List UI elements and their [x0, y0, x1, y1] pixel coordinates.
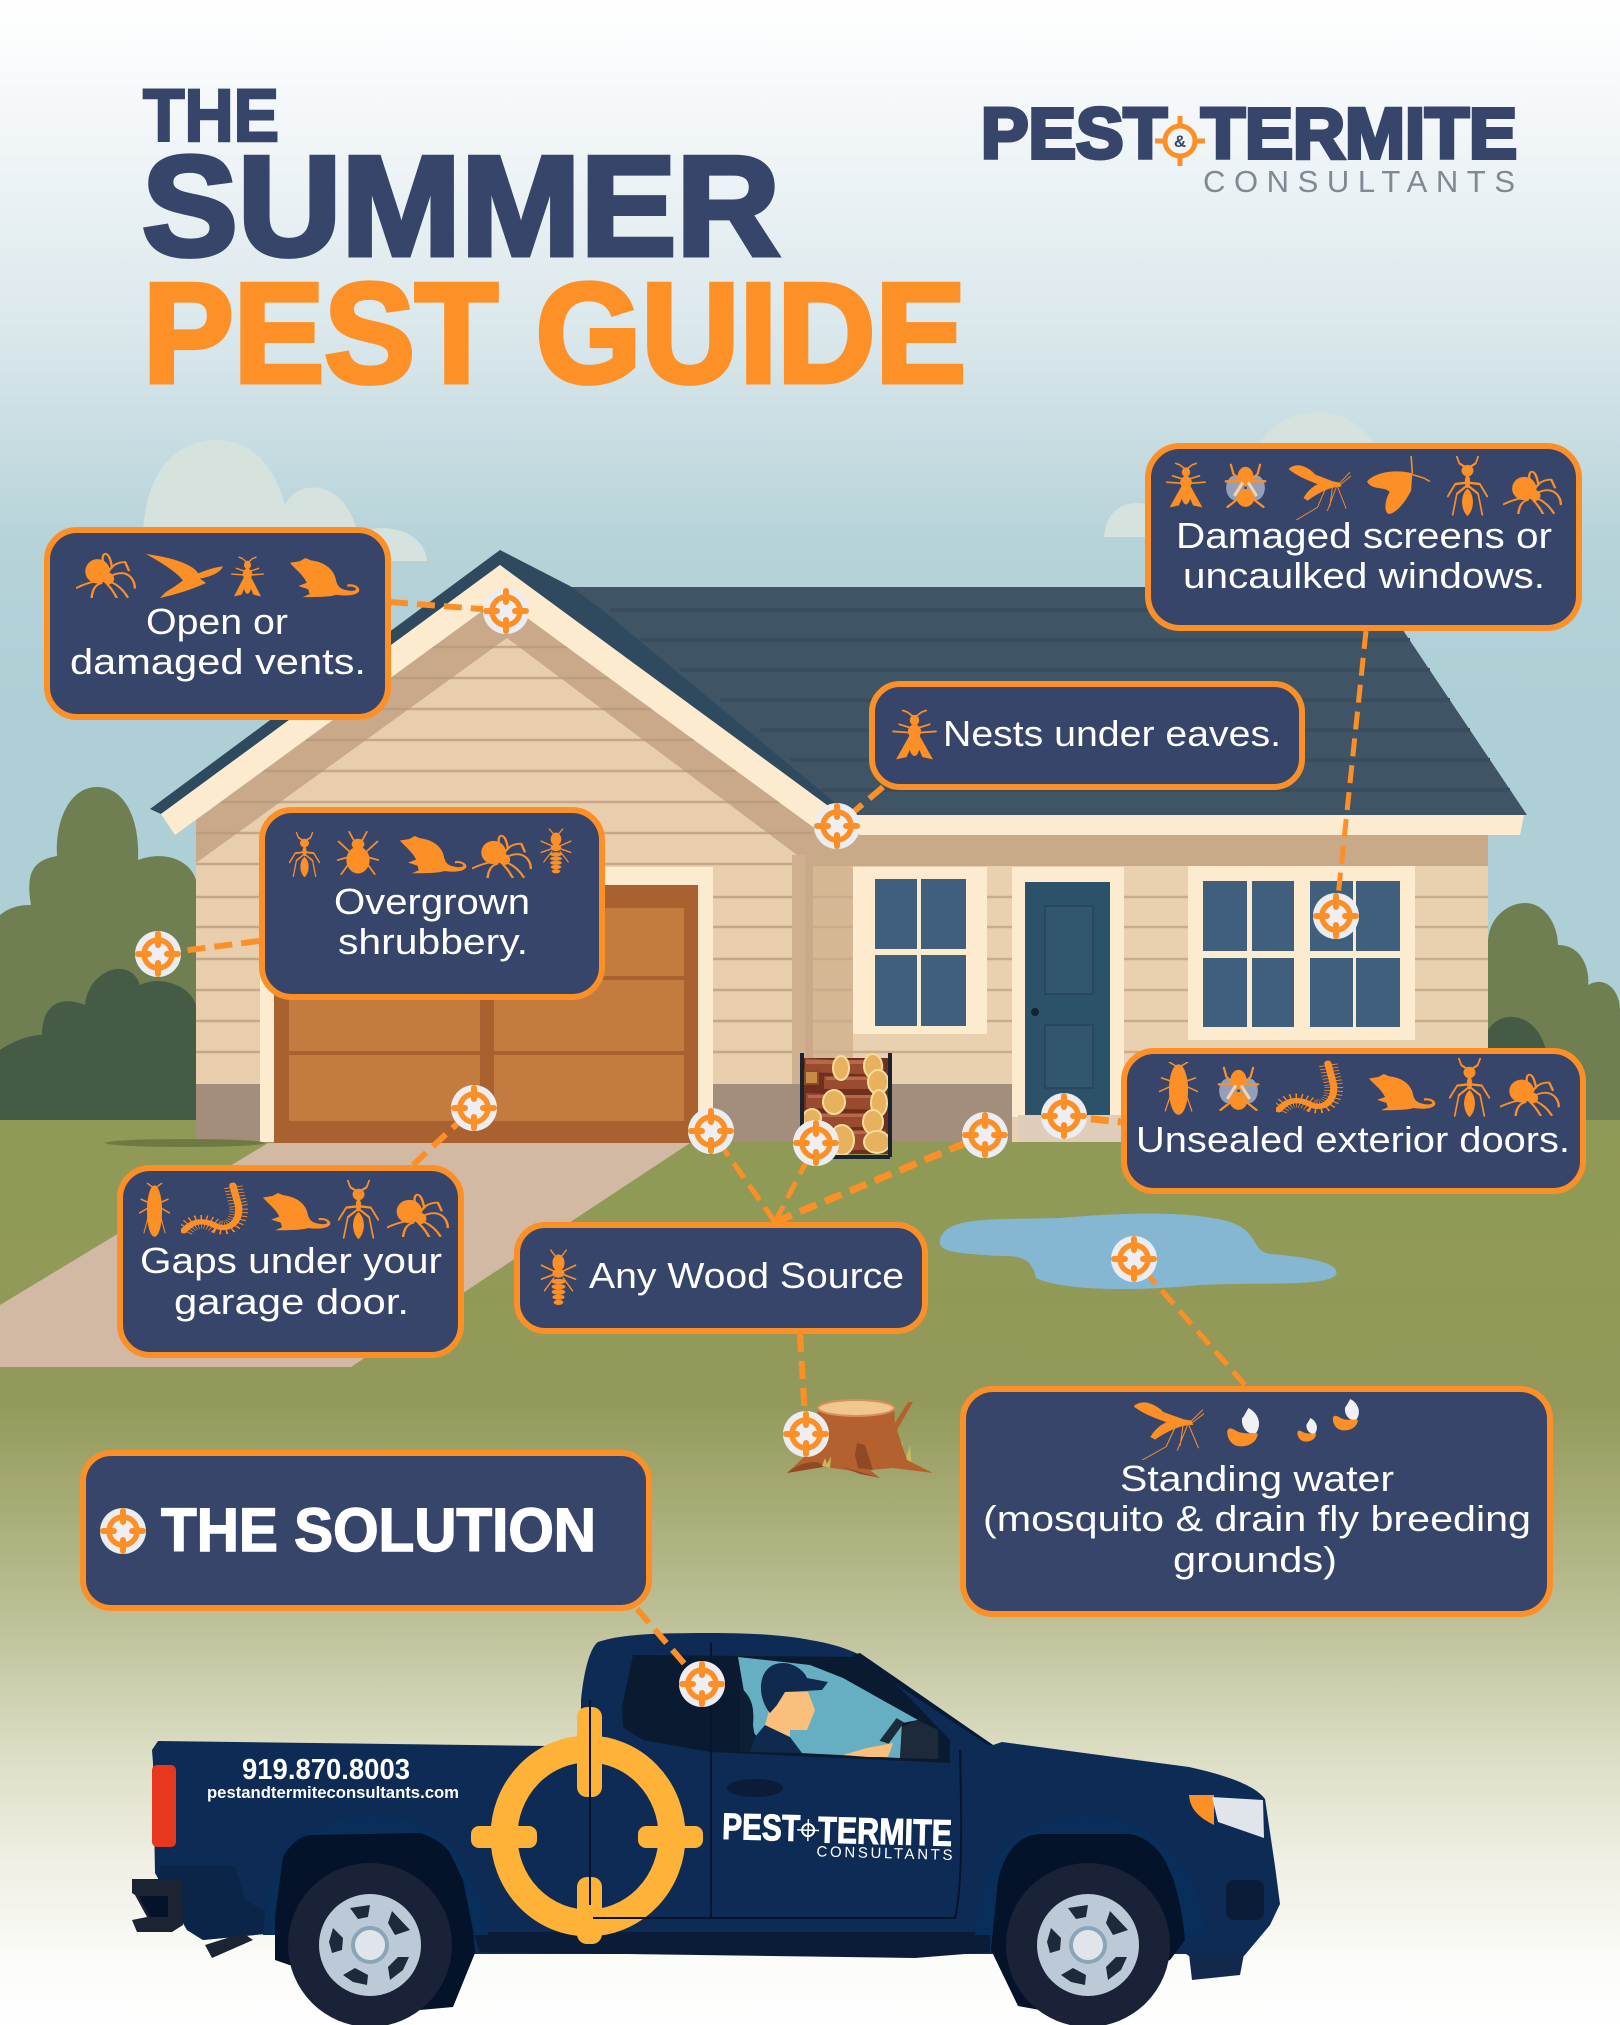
foundation: [196, 1084, 1012, 1142]
truck logo: TERMITE: [818, 1809, 953, 1854]
seat: [740, 1687, 757, 1752]
truck phone number: 919.870.8003: [242, 1754, 410, 1786]
dashed connector lines: [158, 602, 1366, 1684]
panel: the solution: [83, 1453, 649, 1608]
text: grounds): [1173, 1539, 1337, 1580]
panel: open or damaged vents: [47, 530, 388, 717]
driver: [740, 1663, 938, 1759]
truck lower sill: [473, 1932, 990, 1958]
text: damaged vents.: [70, 641, 366, 682]
text: garage door.: [174, 1281, 409, 1322]
text: Open or: [146, 601, 288, 642]
company logo: [981, 95, 1517, 199]
icon: termite: [541, 1250, 576, 1305]
wood pile: [802, 1053, 890, 1157]
rear fender: [263, 1816, 488, 1935]
text: [983, 1458, 1531, 1580]
lawn shadow: [105, 1139, 265, 1147]
icons: [1159, 1059, 1559, 1117]
text: [334, 881, 530, 962]
front fender: [975, 1816, 1205, 1935]
hitch step: [205, 1933, 253, 1958]
text: Any Wood Source: [589, 1255, 904, 1296]
icon: wasp: [893, 711, 936, 759]
cab window: [622, 1655, 950, 1763]
target markers: [135, 588, 1359, 1707]
text: [140, 1240, 442, 1322]
puddle: [940, 1214, 1336, 1289]
heading: THE SOLUTION: [161, 1496, 596, 1564]
truck logo: CONSULTANTS: [816, 1843, 953, 1864]
panel: damaged screens: [1148, 446, 1579, 628]
trees right: [1488, 903, 1620, 1125]
steering wheel: [882, 1720, 902, 1742]
truck logo: PEST: [722, 1806, 801, 1849]
icons: [290, 829, 571, 878]
gable roof edge: [150, 550, 500, 814]
truck website: pestandtermiteconsultants.com: [207, 1783, 459, 1802]
house: [105, 550, 1527, 1147]
panel: gaps under garage door: [120, 1168, 461, 1355]
rear wheel arch: [275, 1833, 475, 2010]
door handle: [727, 1779, 783, 1797]
front wheel: [1006, 1863, 1170, 2025]
tree stump: [787, 1400, 933, 1478]
company logo: TERMITE: [1201, 95, 1517, 174]
cap: [761, 1663, 828, 1713]
company logo: &: [1174, 132, 1186, 151]
text: Nests under eaves.: [943, 713, 1281, 754]
text: Gaps under your: [140, 1240, 442, 1281]
grille vent: [1226, 1880, 1264, 1920]
right window: [1188, 866, 1415, 1040]
truck: [132, 1633, 1280, 2025]
gable trim: [161, 565, 840, 835]
big crosshair: [471, 1707, 703, 1944]
trees left: [0, 787, 196, 1125]
icons: [1167, 456, 1561, 520]
driveway: [0, 1143, 690, 1367]
icons: [1134, 1399, 1359, 1460]
headlight: [1189, 1795, 1264, 1838]
title: PEST GUIDE: PEST GUIDE: [143, 254, 966, 413]
title: SUMMER: SUMMER: [142, 127, 780, 286]
panel: nests under eaves: [872, 684, 1302, 787]
panel: overgrown shrubbery: [262, 810, 602, 997]
rear wheel: [288, 1863, 452, 2025]
front wheel arch: [991, 1834, 1185, 2010]
roof shadow strip: [852, 1653, 993, 1745]
text: Overgrown: [334, 881, 530, 922]
truck body: [152, 1633, 1280, 1956]
right cloud: [1104, 412, 1385, 548]
eave fascia: [835, 815, 1524, 835]
face: [765, 1692, 815, 1737]
panel: any wood source: [517, 1225, 925, 1331]
icons: [77, 554, 359, 598]
rear bumper: [132, 1879, 183, 1932]
front door: [1012, 867, 1126, 1142]
right wing wall: [795, 820, 1488, 1142]
door lines: [590, 1643, 961, 1918]
ground: [0, 1120, 1620, 2025]
text: Unsealed exterior doors.: [1136, 1119, 1570, 1160]
front chin: [1189, 1954, 1244, 1980]
title: THE: THE: [143, 74, 279, 157]
panel: standing water: [963, 1389, 1550, 1614]
text: (mosquito & drain fly breeding: [983, 1498, 1531, 1539]
company logo: PEST: [981, 95, 1167, 174]
truck logo: [721, 1806, 954, 1864]
garage door: [260, 867, 713, 1143]
text: shrubbery.: [338, 921, 528, 962]
icons: [139, 1181, 448, 1239]
panel: unsealed exterior doors: [1124, 1051, 1583, 1191]
left cloud: [94, 440, 427, 561]
company logo: CONSULTANTS: [1203, 164, 1515, 199]
left window: [853, 867, 987, 1034]
tail light: [152, 1765, 176, 1847]
icon: target: [100, 1508, 146, 1554]
dashboard mirror: [900, 1720, 938, 1759]
text: Damaged screens or: [1176, 515, 1552, 556]
text: [70, 601, 366, 682]
text: [1176, 515, 1552, 596]
rear lower panel: [158, 1866, 275, 1940]
sky background: [0, 0, 1620, 1130]
text: Standing water: [1120, 1458, 1394, 1499]
gable wall: [196, 612, 813, 1084]
arm and hand: [843, 1743, 893, 1757]
text: uncaulked windows.: [1183, 555, 1545, 596]
shirt: [750, 1725, 802, 1753]
main roof: [500, 550, 1527, 815]
